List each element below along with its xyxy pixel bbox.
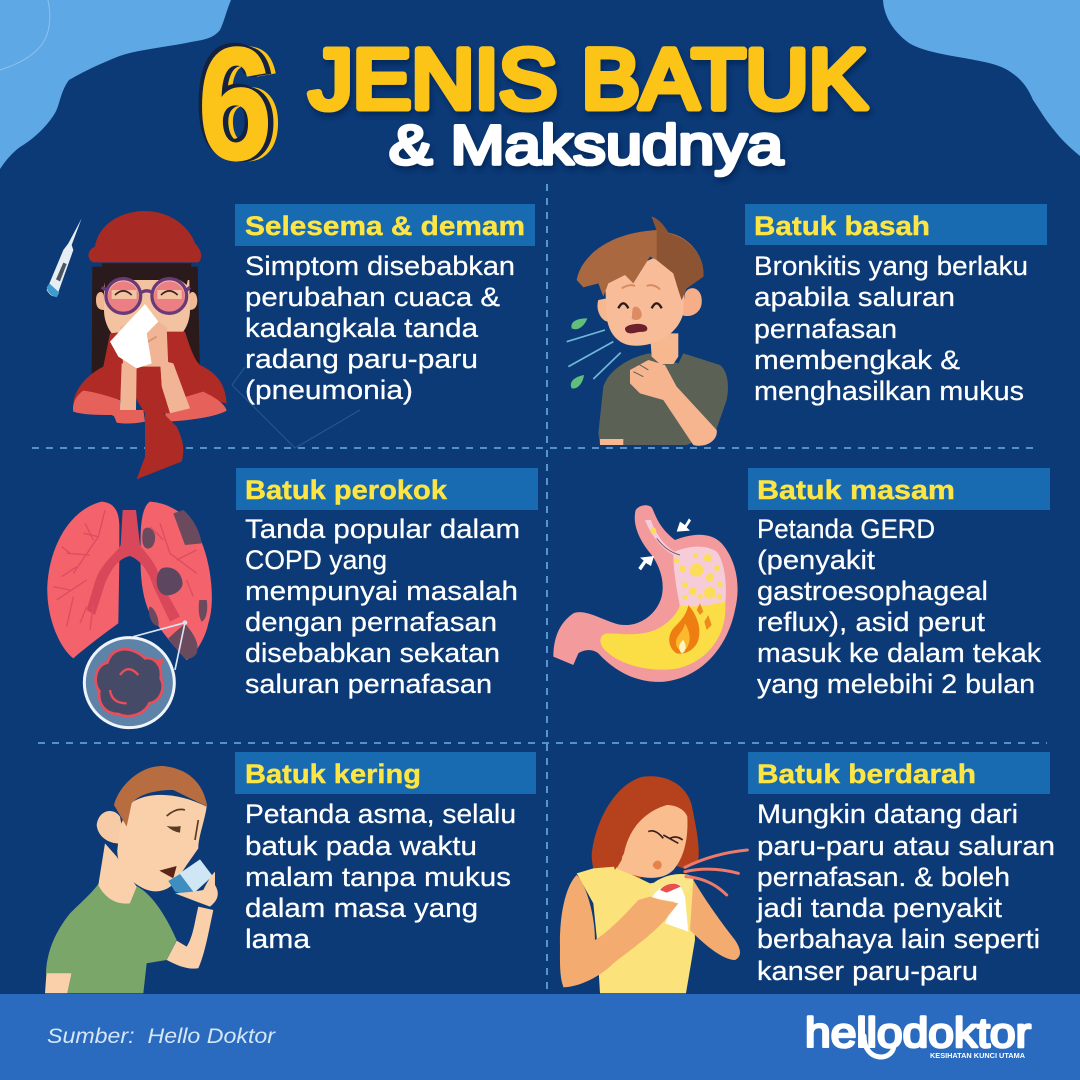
body text: pernafasan. & boleh: [757, 862, 1010, 892]
body text: gastroesophageal: [757, 576, 988, 606]
body text: berbahaya lain seperti: [757, 924, 1040, 954]
heading bar: [235, 752, 536, 794]
heading bar: Batuk berdarah: [757, 759, 976, 789]
body text: lama: [245, 924, 311, 954]
heading bar: Selesema & demam: [245, 211, 525, 241]
heading bar: [236, 468, 538, 510]
icon: lungs with zoomed lesion: [47, 502, 212, 728]
title line: JENIS BATUK: JENIS BATUK: [309, 32, 867, 126]
body text: malam tanpa mukus: [245, 862, 511, 892]
icon: boy coughing: [567, 217, 728, 446]
body text: Petanda asma, selalu: [245, 799, 516, 829]
body text: [757, 514, 1042, 699]
body text: yang melebihi 2 bulan: [757, 669, 1035, 699]
body text: kadangkala tanda: [245, 313, 479, 343]
panel: Batuk masam: [553, 468, 1050, 699]
body text: COPD yang: [245, 545, 387, 575]
body text: jadi tanda penyakit: [756, 893, 1003, 923]
icon: woman with tissue and thermometer: [47, 211, 227, 479]
body text: [245, 514, 520, 699]
logo: hellodoktor: KESIHATAN KUNCI UTAMA: [930, 1053, 1025, 1060]
heading bar: Batuk basah: [754, 211, 930, 241]
heading bar: [748, 752, 1050, 794]
body text: Petanda GERD: [757, 514, 935, 544]
body text: masuk ke dalam tekak: [757, 638, 1042, 668]
title number 6: 6: [208, 14, 282, 193]
body text: [245, 799, 516, 954]
panel: Batuk berdarah: [560, 752, 1055, 993]
body text: kanser paru-paru: [757, 956, 978, 986]
body text: pernafasan: [754, 314, 897, 344]
icon: stomach with acid reflux: [553, 505, 738, 682]
icon: man using inhaler: [45, 766, 218, 993]
body text: menghasilkan mukus: [754, 376, 1024, 406]
heading bar: Batuk perokok: [245, 475, 448, 505]
body text: [754, 251, 1028, 406]
body text: dalam masa yang: [245, 893, 478, 923]
panel: Batuk perokok: [47, 468, 538, 728]
panel: Selesema & demam: [47, 204, 535, 479]
logo: hellodoktor: hellodoktor: [805, 1009, 1031, 1056]
body text: apabila saluran: [754, 282, 955, 312]
title: [195, 11, 867, 193]
body text: reflux), asid perut: [757, 607, 986, 637]
body text: paru-paru atau saluran: [757, 831, 1055, 861]
heading bar: Batuk kering: [245, 759, 421, 789]
body text: Bronkitis yang berlaku: [754, 251, 1028, 281]
body text: saluran pernafasan: [245, 669, 492, 699]
panel: Batuk basah: [567, 204, 1047, 446]
body text: [245, 251, 515, 405]
body text: radang paru-paru: [245, 344, 478, 374]
body text: disebabkan sekatan: [245, 638, 500, 668]
body text: [756, 799, 1055, 986]
body text: perubahan cuaca &: [245, 282, 500, 312]
body text: mempunyai masalah: [245, 576, 518, 606]
body text: batuk pada waktu: [245, 831, 477, 861]
body text: membengkak &: [754, 345, 960, 375]
body text: Simptom disebabkan: [245, 251, 515, 281]
title line: & Maksudnya: & Maksudnya: [389, 113, 784, 176]
heading bar: [748, 468, 1050, 510]
title number 6: 6: [195, 11, 269, 190]
panel: Batuk kering: [45, 752, 536, 993]
background blob: top left: [0, 0, 231, 169]
body text: dengan pernafasan: [245, 607, 497, 637]
heading bar: [745, 204, 1047, 245]
body text: Mungkin datang dari: [757, 799, 1018, 829]
source credit: Sumber: Hello Doktor: [47, 1025, 276, 1048]
heading bar: [235, 204, 535, 246]
heading bar: Batuk masam: [757, 475, 955, 505]
body text: (pneumonia): [245, 375, 413, 405]
body text: (penyakit: [757, 545, 876, 575]
background blob: top right: [883, 0, 1080, 156]
title number 6: 6: [203, 14, 277, 193]
title number 6: 6: [198, 14, 272, 193]
body text: Tanda popular dalam: [245, 514, 520, 544]
footer band: [0, 994, 1080, 1080]
icon: woman coughing blood into tissue: [560, 776, 747, 993]
